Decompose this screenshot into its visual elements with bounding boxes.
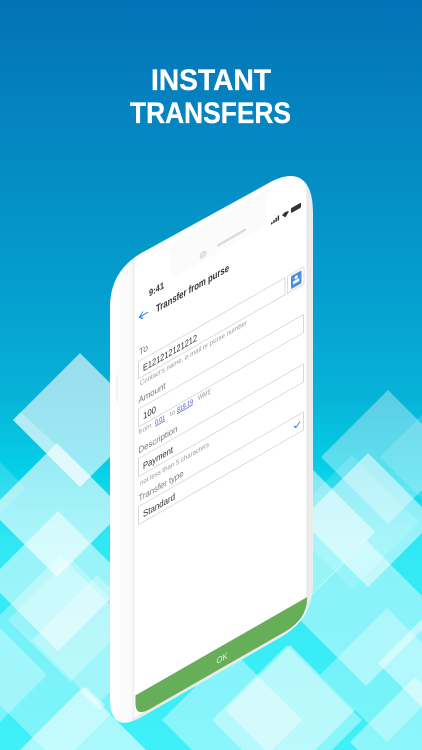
label: Description bbox=[138, 424, 178, 456]
left diamond pattern bbox=[0, 353, 165, 750]
hint: not less than 5 characters bbox=[140, 440, 209, 488]
hint: Contact's name, e-mail or purse number bbox=[140, 318, 247, 388]
header: back arrow bbox=[140, 309, 148, 321]
notch bbox=[160, 183, 278, 285]
form field: Amount bbox=[138, 302, 304, 436]
amount limits: to bbox=[170, 407, 175, 418]
bottom diamond pattern bbox=[162, 645, 362, 750]
title: INSTANT bbox=[151, 64, 271, 97]
input value: Payment bbox=[143, 445, 173, 472]
wifi bbox=[282, 210, 289, 219]
amount limits bbox=[138, 387, 211, 436]
right diamond pattern bbox=[225, 390, 422, 750]
form field: To bbox=[138, 264, 285, 388]
speaker bbox=[217, 228, 246, 247]
label: Transfer type bbox=[138, 468, 184, 504]
amount limits: 819.19 bbox=[177, 397, 193, 414]
amount limits: WME bbox=[198, 387, 211, 402]
label: Amount bbox=[138, 381, 166, 406]
side button bbox=[116, 374, 118, 402]
status bar time: 9:41 bbox=[149, 280, 164, 299]
camera bbox=[200, 250, 206, 259]
title bbox=[130, 64, 291, 130]
input value: Standard bbox=[143, 492, 175, 520]
input value: E121212121212 bbox=[143, 333, 197, 374]
input box bbox=[138, 315, 304, 427]
battery bbox=[291, 203, 301, 213]
form field: Description bbox=[138, 352, 304, 488]
amount limits: from bbox=[138, 421, 151, 436]
bottom edge shading bbox=[132, 624, 298, 722]
input box bbox=[138, 412, 304, 525]
header: screen title: Transfer from purse bbox=[156, 262, 229, 315]
signal bars bbox=[271, 215, 279, 225]
label: To bbox=[139, 343, 148, 358]
contact icon bbox=[291, 270, 302, 289]
OK button bbox=[136, 597, 307, 717]
input box bbox=[138, 278, 285, 379]
title: TRANSFERS bbox=[130, 97, 291, 130]
phone body bbox=[110, 155, 313, 735]
phone bbox=[110, 155, 313, 735]
button shape bbox=[136, 597, 307, 717]
button label: OK bbox=[216, 650, 228, 667]
contact picker button bbox=[288, 267, 304, 293]
dropdown check bbox=[294, 422, 300, 429]
input box bbox=[138, 364, 304, 477]
input value: 100 bbox=[143, 405, 156, 422]
amount limits: 0.01 bbox=[155, 413, 165, 427]
button frame bbox=[288, 267, 304, 293]
form field: Transfer type bbox=[138, 400, 304, 525]
status icons bbox=[271, 203, 301, 226]
